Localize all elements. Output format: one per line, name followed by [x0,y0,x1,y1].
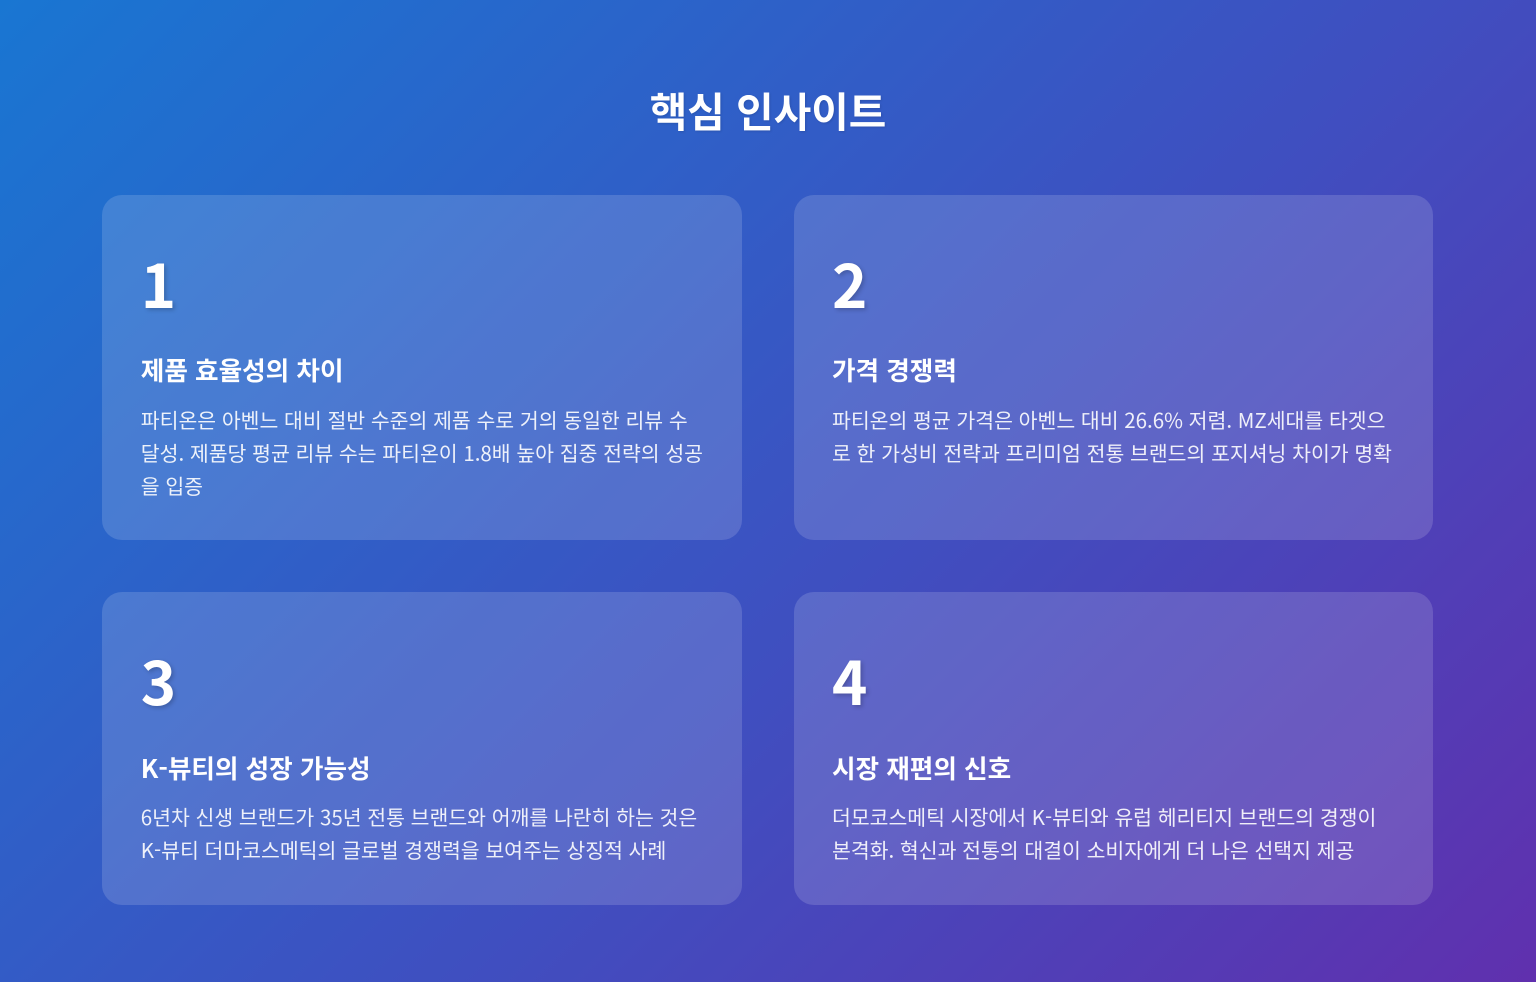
number 4: 4 [832,636,867,723]
heading 3: K-뷰티의 성장 가능성 [141,749,371,786]
number 1: 1 [141,239,176,326]
text block 1: 달성. 제품당 평균 리뷰 수는 파티온이 1.8배 높아 집중 전략의 성공 [141,437,703,467]
text block 4 [832,801,1376,864]
heading 4: 시장 재편의 신호 [832,749,1011,786]
number 3: 3 [141,636,176,723]
panel: insight 4 [794,592,1433,905]
heading 2: 가격 경쟁력 [832,351,957,388]
text block 3: 6년차 신생 브랜드가 35년 전통 브랜드와 어깨를 나란히 하는 것은 [141,801,697,831]
text block 3: K-뷰티 더마코스메틱의 글로벌 경쟁력을 보여주는 상징적 사례 [141,834,666,864]
heading 1: 제품 효율성의 차이 [141,351,343,388]
panel: insight 1 [102,195,742,540]
number 2: 2 [832,239,867,326]
text block 4: 본격화. 혁신과 전통의 대결이 소비자에게 더 나은 선택지 제공 [832,834,1354,864]
panel: insight 3 [102,592,742,905]
text block 4: 더모코스메틱 시장에서 K-뷰티와 유럽 헤리티지 브랜드의 경쟁이 [832,801,1376,831]
text block 1 [141,404,703,500]
panel: insight 2 [794,195,1433,540]
text block 1: 을 입증 [141,470,203,500]
text block 3 [141,801,697,864]
text block 2 [832,404,1392,467]
text block 2: 로 한 가성비 전략과 프리미엄 전통 브랜드의 포지셔닝 차이가 명확 [832,437,1392,467]
title: 핵심 인사이트 [650,80,886,138]
text block 1: 파티온은 아벤느 대비 절반 수준의 제품 수로 거의 동일한 리뷰 수 [141,404,688,434]
text block 2: 파티온의 평균 가격은 아벤느 대비 26.6% 저렴. MZ세대를 타겟으 [832,404,1385,434]
